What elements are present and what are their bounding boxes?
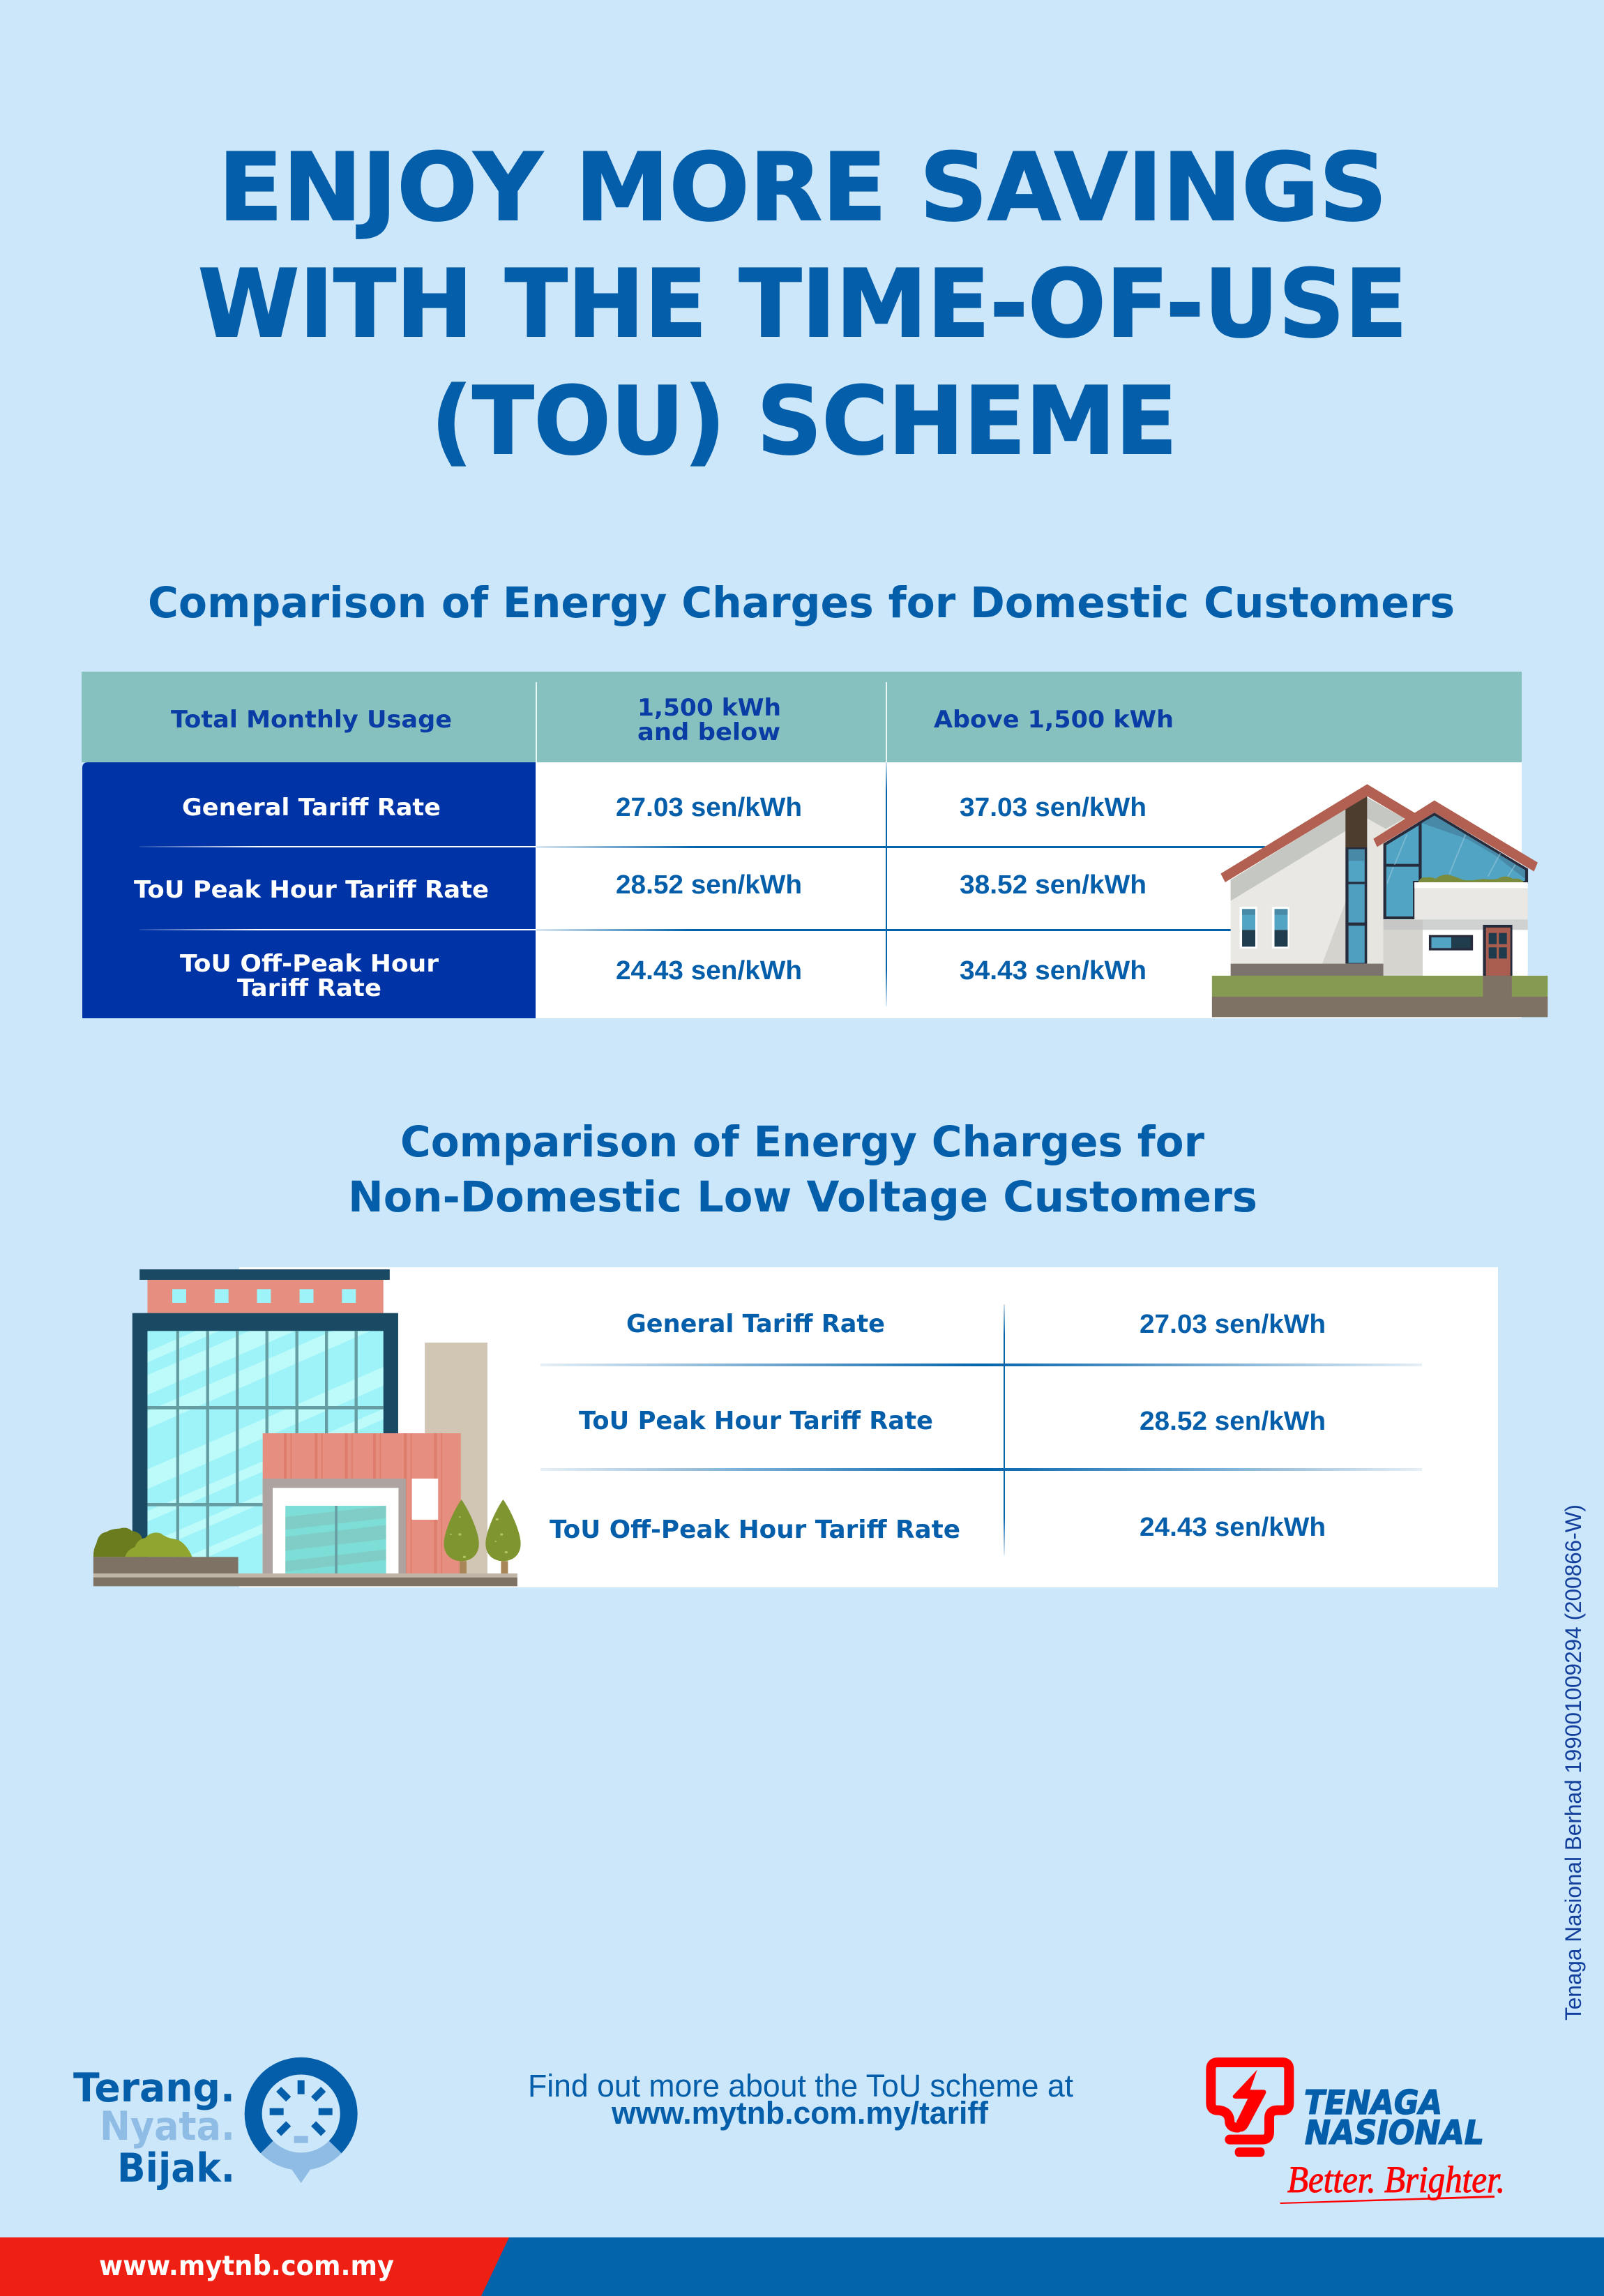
table body background [536,762,1522,1018]
panel: domestic tariff table [82,672,1522,1018]
title [198,133,1407,476]
row labels column: Tariff Rate [237,974,381,1002]
call to action text [528,2068,1073,2131]
row labels column: General Tariff Rate [182,794,441,822]
table values: 38.52 sen/kWh [960,870,1147,900]
logo wordmark: Nyata. [100,2104,235,2150]
footer website text: www.mytnb.com.my [99,2251,394,2282]
logo tagline: Better. Brighter. [1287,2159,1505,2200]
table header row: Above 1,500 kWh [934,706,1174,734]
logo wordmark: Bijak. [117,2145,235,2191]
row values [1140,1310,1326,1542]
table background [239,1267,1498,1587]
vertical company registration text: Tenaga Nasional Berhad 199001009294 (200866-W) [1561,1504,1586,2021]
table header row: and below [637,718,780,746]
logo wordmark [73,2065,235,2191]
call to action text: www.mytnb.com.my/tariff [611,2095,989,2131]
table values: 34.43 sen/kWh [960,956,1147,985]
table values: 28.52 sen/kWh [616,870,802,900]
icon: light dial [245,2057,358,2183]
logo wordmark: TENAGA [1304,2084,1442,2122]
call to action text: Find out more about the ToU scheme at [528,2068,1073,2104]
table header row [82,672,1522,762]
title: ENJOY MORE SAVINGS [218,133,1387,242]
table values: 37.03 sen/kWh [960,793,1147,822]
title: (TOU) SCHEME [431,367,1177,476]
table grid lines [540,1304,1422,1555]
icon: lightbulb with bolt [1211,2062,1289,2157]
logo: Tenaga Nasional [1211,2062,1505,2204]
heading: non-domestic low voltage customers: Non-Domestic Low Voltage Customers [348,1172,1257,1222]
heading: domestic customers: Comparison of Energy Charges for Domestic Customers [148,578,1455,628]
row labels column: ToU Peak Hour Tariff Rate [134,876,489,904]
table header row: Total Monthly Usage [171,706,452,734]
icon: house [1212,784,1548,1017]
table values [616,793,1147,985]
row values: 27.03 sen/kWh [1140,1310,1326,1339]
panel: non-domestic tariff table [239,1267,1498,1587]
row labels: ToU Off-Peak Hour Tariff Rate [550,1516,960,1544]
logo wordmark [1304,2084,1484,2152]
heading: non-domestic low voltage customers [348,1117,1257,1222]
table values: 27.03 sen/kWh [616,793,802,822]
heading: non-domestic low voltage customers: Comparison of Energy Charges for [400,1117,1204,1167]
logo wordmark: NASIONAL [1305,2114,1484,2152]
row labels column [82,762,536,1018]
row labels: ToU Peak Hour Tariff Rate [579,1407,933,1435]
icon: office building [93,1250,521,1586]
table values: 24.43 sen/kWh [616,956,802,985]
footer bar [0,2237,1604,2296]
logo: Terang Nyata Bijak [73,2057,358,2191]
row labels [550,1310,960,1544]
row values: 24.43 sen/kWh [1140,1513,1326,1542]
row labels: General Tariff Rate [626,1310,885,1338]
row labels column: ToU Off-Peak Hour [180,950,439,978]
row values: 28.52 sen/kWh [1140,1407,1326,1436]
table grid lines [536,762,1265,1006]
logo wordmark: Terang. [73,2065,235,2111]
title: WITH THE TIME-OF-USE [198,250,1407,358]
table header row: 1,500 kWh [637,694,781,722]
